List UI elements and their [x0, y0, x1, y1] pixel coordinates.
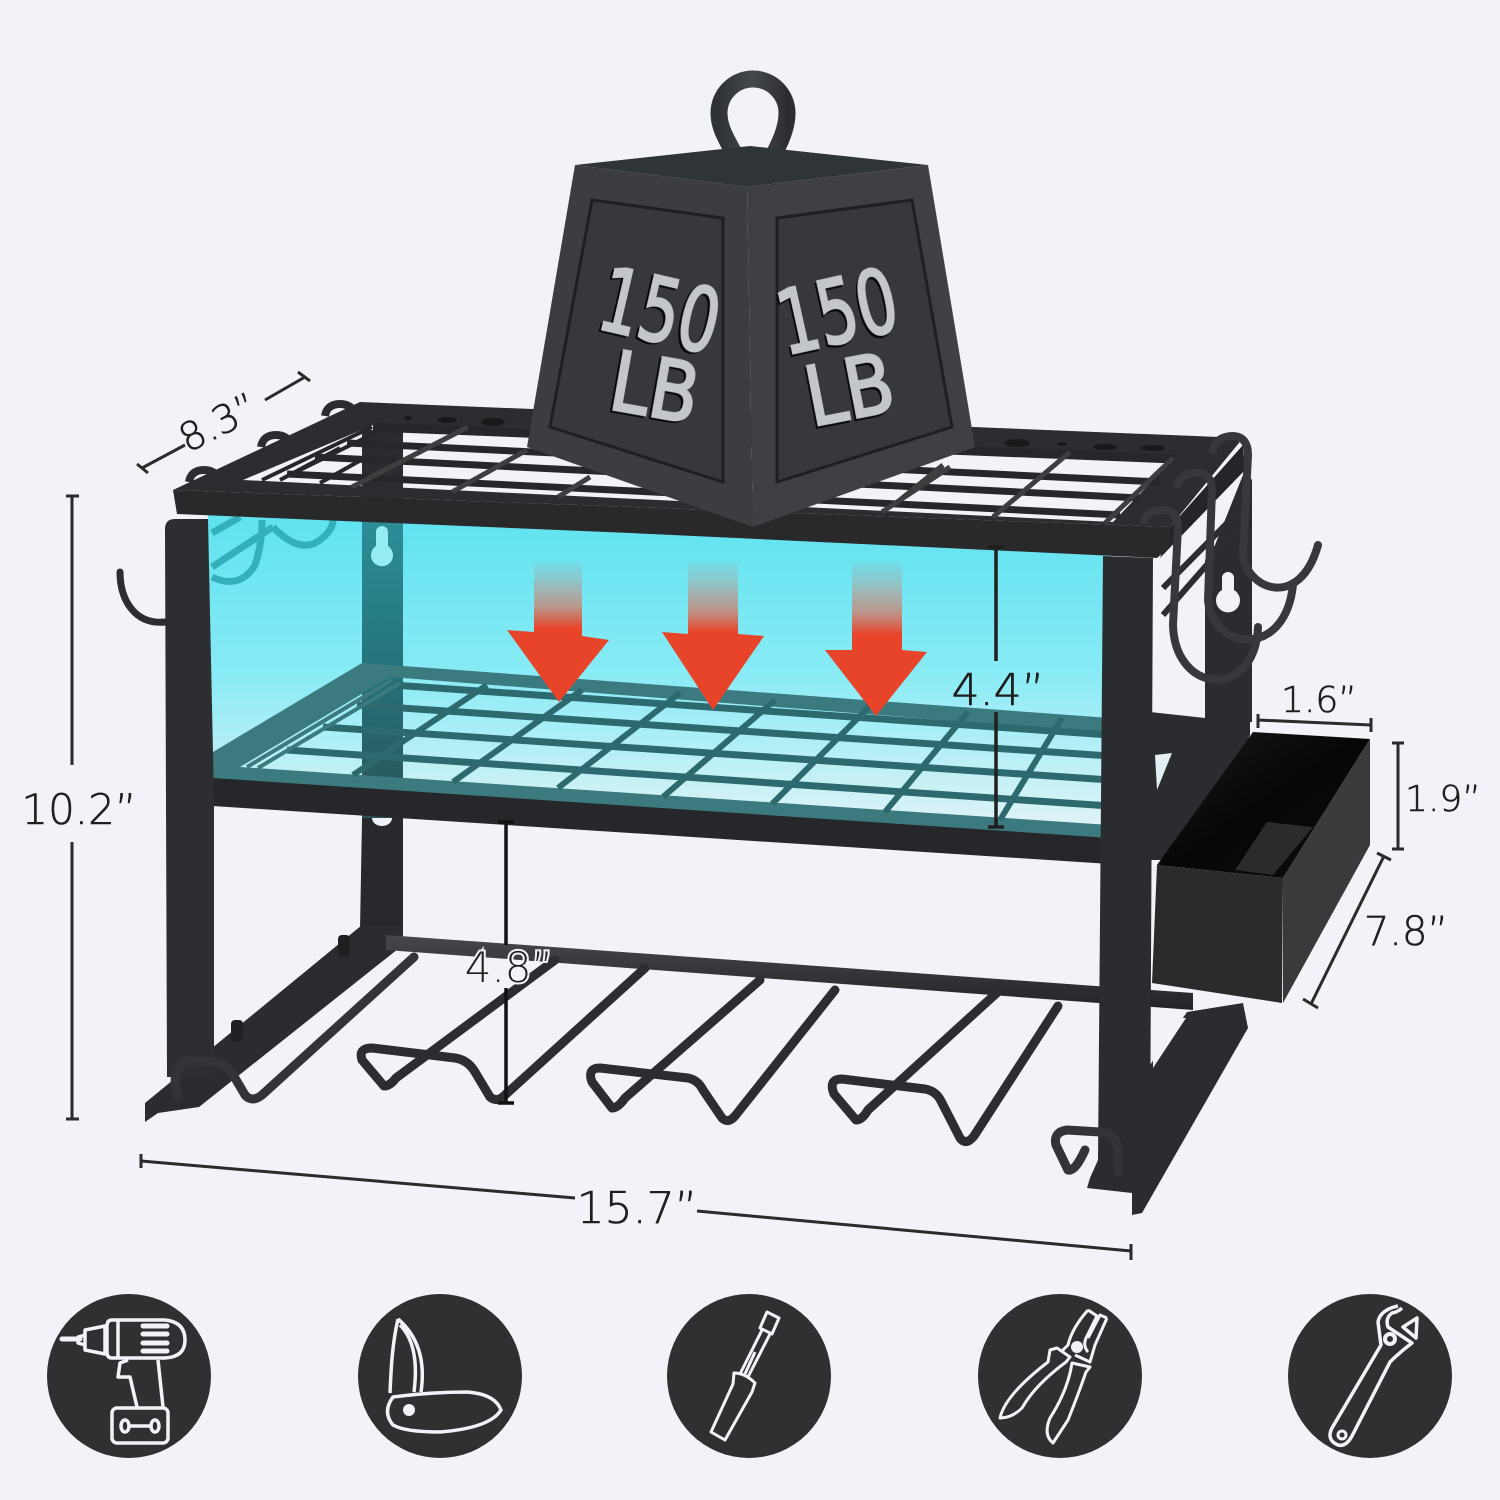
rear upright behind panel	[362, 515, 403, 830]
top shelf frame	[173, 402, 1243, 527]
ghost hooks seen through panel	[212, 517, 333, 581]
dimension: 4.4 inch shelf gap	[952, 547, 1044, 827]
icon: folding knife	[358, 1294, 522, 1458]
left recessed panel	[550, 200, 723, 482]
arrow 1	[507, 560, 609, 702]
box front	[1152, 865, 1283, 1003]
dimension: 4.4 inch shelf gap: 4.4”	[952, 665, 1044, 716]
dimension: 1.9 inch box height	[1392, 743, 1481, 849]
dimension: 7.8 inch box depth	[1303, 853, 1448, 1008]
dimension: 8.3 inch depth: 8.3”	[172, 385, 266, 462]
keyhole	[371, 526, 393, 566]
left front upright	[165, 519, 214, 1077]
icon: pliers	[978, 1294, 1142, 1458]
drill holder rods	[361, 960, 1058, 1142]
lower shelf front lip	[213, 778, 1110, 864]
dimension: 1.6 inch box width: 1.6”	[1281, 680, 1357, 721]
right side hooks	[1144, 436, 1318, 680]
weight right face	[747, 165, 975, 527]
lower shelf wires	[247, 680, 1110, 820]
bracket nuts	[231, 935, 350, 1042]
side rods below top shelf	[1163, 507, 1243, 615]
top shelf front lip	[173, 490, 1172, 558]
icon: adjustable wrench	[1288, 1294, 1452, 1458]
right recessed panel	[777, 200, 952, 482]
dimension: 1.6 inch box width	[1258, 680, 1371, 732]
rear upright below lower shelf	[360, 818, 403, 930]
dimension: 4.8 inch lower gap: 4.8”	[465, 943, 553, 992]
top shelf right side lip	[1160, 445, 1245, 558]
right LB label: LB	[797, 336, 902, 446]
weight ring	[719, 79, 787, 158]
keyhole notch	[372, 818, 392, 826]
red down arrows	[507, 560, 927, 716]
weight left face	[527, 165, 753, 527]
top shelf holes	[404, 416, 1165, 451]
dimension: 10.2 inch height: 10.2”	[21, 785, 137, 834]
lower shelf back end right of upright	[1150, 712, 1250, 860]
box side	[1283, 739, 1370, 1003]
dimension: 4.8 inch lower gap	[465, 822, 553, 1103]
dimension: 8.3 inch depth	[137, 372, 310, 473]
plate gap	[1153, 1018, 1186, 1068]
dimension: 7.8 inch box depth: 7.8”	[1364, 909, 1448, 955]
box interior	[1157, 732, 1370, 878]
box floor	[1235, 822, 1313, 875]
icon: drill	[47, 1294, 211, 1458]
first holder hook in front of upright	[175, 957, 414, 1099]
rear cross bar	[386, 935, 1193, 1010]
rear upright keyhole	[1216, 572, 1240, 612]
rack	[120, 402, 1370, 1215]
right wall bracket plate	[1087, 1003, 1248, 1215]
lower shelf frame	[213, 663, 1110, 840]
left wall bracket plate	[145, 925, 403, 1122]
top shelf wires	[262, 427, 1175, 523]
drill bit and vents	[62, 1326, 167, 1351]
left 150 label: 150	[590, 248, 730, 375]
dimension: 1.9 inch box height: 1.9”	[1405, 779, 1481, 820]
weight top face	[575, 146, 928, 187]
mounting loops on left side	[189, 404, 357, 482]
dimension: 15.7 inch width: 15.7”	[577, 1183, 697, 1234]
left side hook	[120, 572, 165, 622]
arrow 3	[825, 560, 927, 716]
right rear upright	[1205, 470, 1252, 722]
icon: screwdriver	[667, 1294, 831, 1458]
storage box	[1152, 732, 1370, 1003]
bracket behind top shelf seen through grid	[362, 430, 403, 500]
150 LB weight	[527, 79, 975, 527]
right 150 label: 150	[768, 249, 907, 375]
dimension: 15.7 inch width	[141, 1154, 1131, 1260]
dimension: 10.2 inch height	[21, 496, 137, 1119]
arrow 2	[662, 560, 764, 710]
cyan back panel	[208, 512, 1110, 862]
last holder hook	[1055, 1130, 1118, 1172]
left LB label: LB	[603, 334, 706, 443]
right front upright	[1098, 556, 1153, 1163]
